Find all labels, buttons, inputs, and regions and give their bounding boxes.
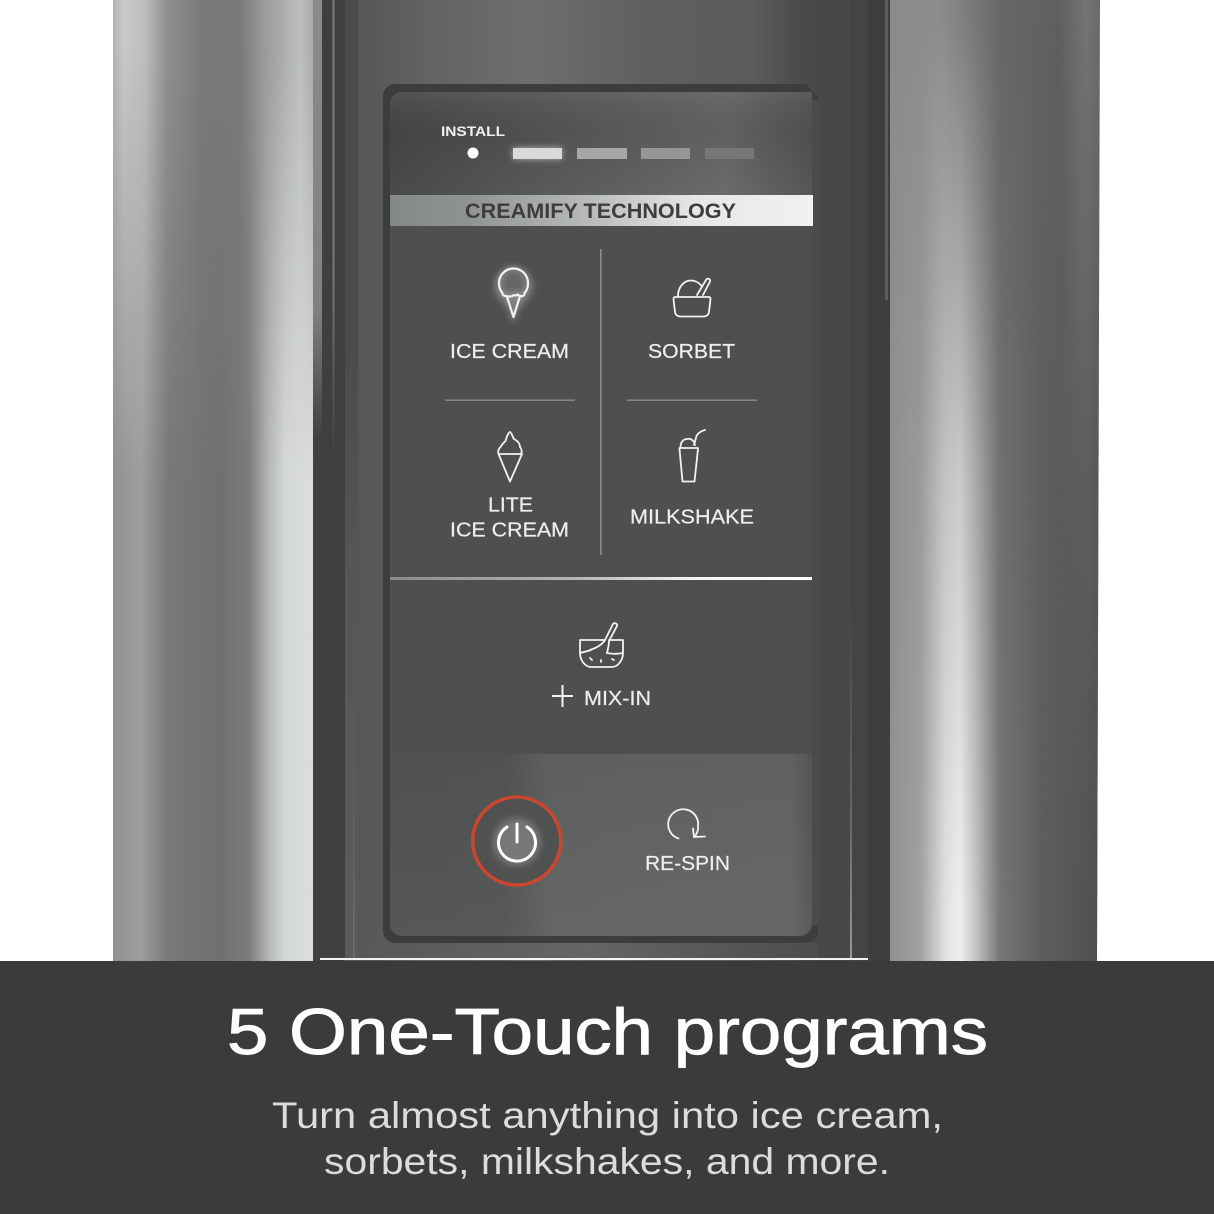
re-spin button: RE-SPIN [645, 853, 730, 875]
install indicator dot [468, 148, 478, 158]
program: lite ice cream: LITE [488, 494, 533, 516]
program: lite ice cream [450, 432, 569, 542]
creamify technology banner [390, 195, 813, 226]
icon: re-spin arrow [668, 809, 705, 838]
program: lite ice cream: ICE CREAM [450, 520, 569, 542]
panel frame [383, 84, 818, 943]
icon: milkshake glass with straw [680, 430, 705, 482]
subheading: Turn almost anything into ice cream, [272, 1095, 943, 1136]
centre housing of the machine [313, 0, 890, 961]
power button [473, 797, 561, 885]
headline: 5 One-Touch programs [227, 995, 988, 1068]
program: ice cream [450, 268, 569, 363]
re-spin button [645, 809, 730, 875]
program: milkshake [630, 430, 754, 528]
right steel column of the machine [888, 0, 1100, 961]
program: mix-in: MIX-IN [584, 688, 651, 710]
icon: plus sign [552, 685, 573, 707]
icon: sorbet bowl with spoon [673, 279, 711, 317]
program: sorbet: SORBET [648, 341, 735, 363]
creamify technology banner: CREAMIFY TECHNOLOGY [465, 200, 736, 223]
icon: mixing bowl with spatula [580, 623, 623, 667]
icon: soft serve cone [498, 432, 522, 482]
icon: power symbol [498, 824, 536, 861]
control panel [383, 84, 818, 943]
left steel column of the machine [113, 0, 314, 961]
program: milkshake: MILKSHAKE [630, 506, 754, 528]
caption band [0, 961, 1214, 1214]
grid divider lines [390, 249, 812, 580]
progress bar segments [513, 148, 754, 159]
bottom control strip [390, 754, 812, 936]
install label: INSTALL [441, 124, 505, 139]
panel top section with progress indicator [390, 92, 812, 195]
programs area background [390, 226, 812, 754]
subheading: sorbets, milkshakes, and more. [324, 1141, 890, 1182]
program: ice cream: ICE CREAM [450, 341, 569, 363]
program: sorbet [648, 279, 735, 363]
program: mix-in [552, 623, 651, 710]
icon: ice cream cone with glow [494, 268, 534, 317]
subheading [272, 1095, 943, 1182]
